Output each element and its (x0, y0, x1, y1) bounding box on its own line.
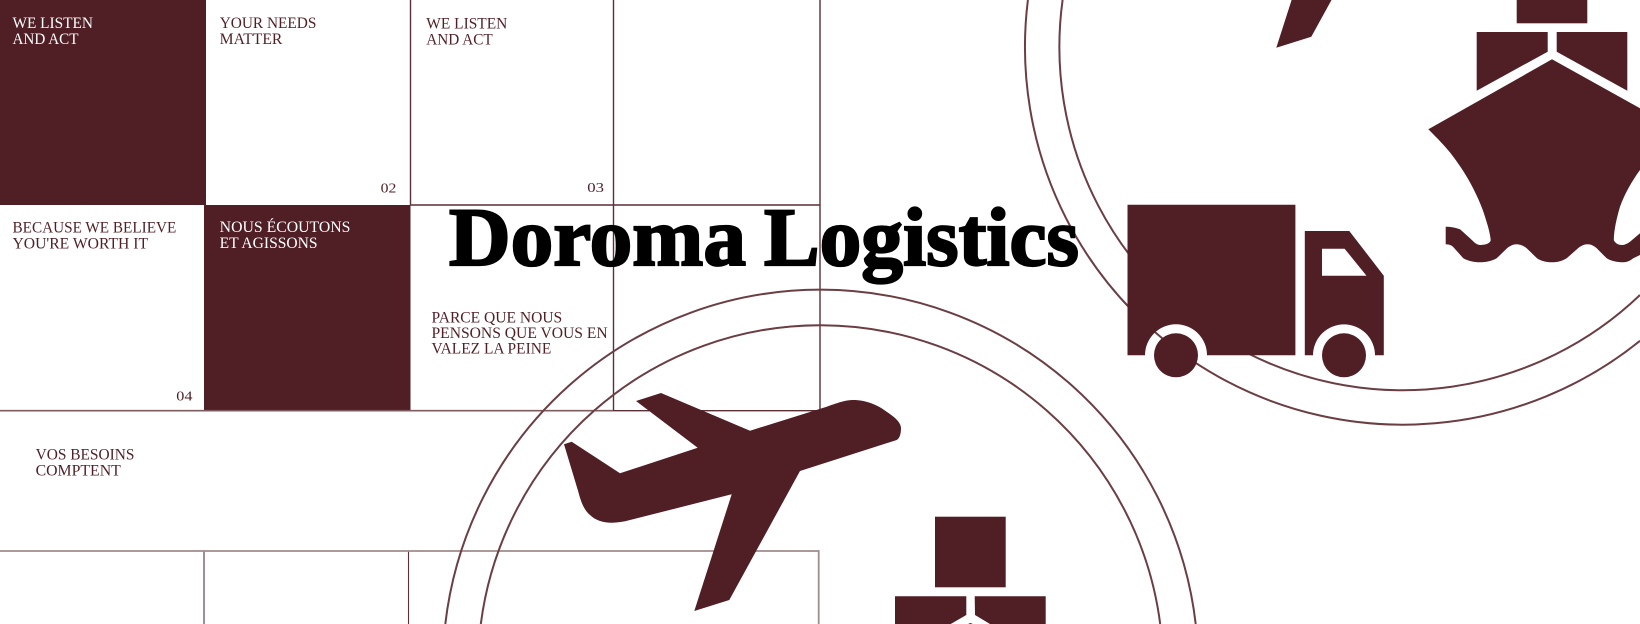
icon: cargo ship at bottom (895, 517, 1046, 624)
circles: lower ring pair (445, 290, 1196, 624)
panel: filled cell second row (204, 205, 410, 410)
text: your needs matter: YOUR NEEDS (220, 15, 316, 32)
text: parce que nous: PENSONS QUE VOUS EN (432, 325, 608, 342)
text: we listen and act, white: AND ACT (12, 31, 79, 48)
text: parce que nous: VALEZ LA PEINE (432, 341, 551, 358)
icon: delivery truck (1128, 205, 1384, 377)
text: because we believe: YOU'RE WORTH IT (12, 235, 149, 252)
icon: cargo ship at top right (1428, 0, 1640, 262)
icon: airplane fragment at top (1276, 0, 1332, 48)
title: Logistics (764, 191, 1079, 283)
text: we listen and act: WE LISTEN (426, 15, 507, 32)
circles: upper ring pair (1025, 0, 1640, 425)
number 04: 04 (176, 389, 192, 404)
text: because we believe: BECAUSE WE BELIEVE (12, 219, 176, 236)
text: parce que nous: PARCE QUE NOUS (432, 310, 562, 327)
text: nous écoutons, white: ET AGISSONS (220, 235, 318, 252)
number 02: 02 (381, 181, 396, 196)
text: we listen and act: AND ACT (426, 31, 493, 48)
title: Doroma (449, 191, 746, 283)
number 03: 03 (587, 181, 604, 196)
text: vos besoins comptent: VOS BESOINS (36, 446, 134, 463)
icon: airplane (564, 393, 901, 611)
text: vos besoins comptent: COMPTENT (36, 462, 121, 479)
panel: filled cell top left (0, 0, 206, 205)
text: we listen and act, white: WE LISTEN (12, 15, 93, 32)
text: your needs matter: MATTER (220, 31, 283, 48)
text: nous écoutons, white: NOUS ÉCOUTONS (220, 219, 350, 236)
